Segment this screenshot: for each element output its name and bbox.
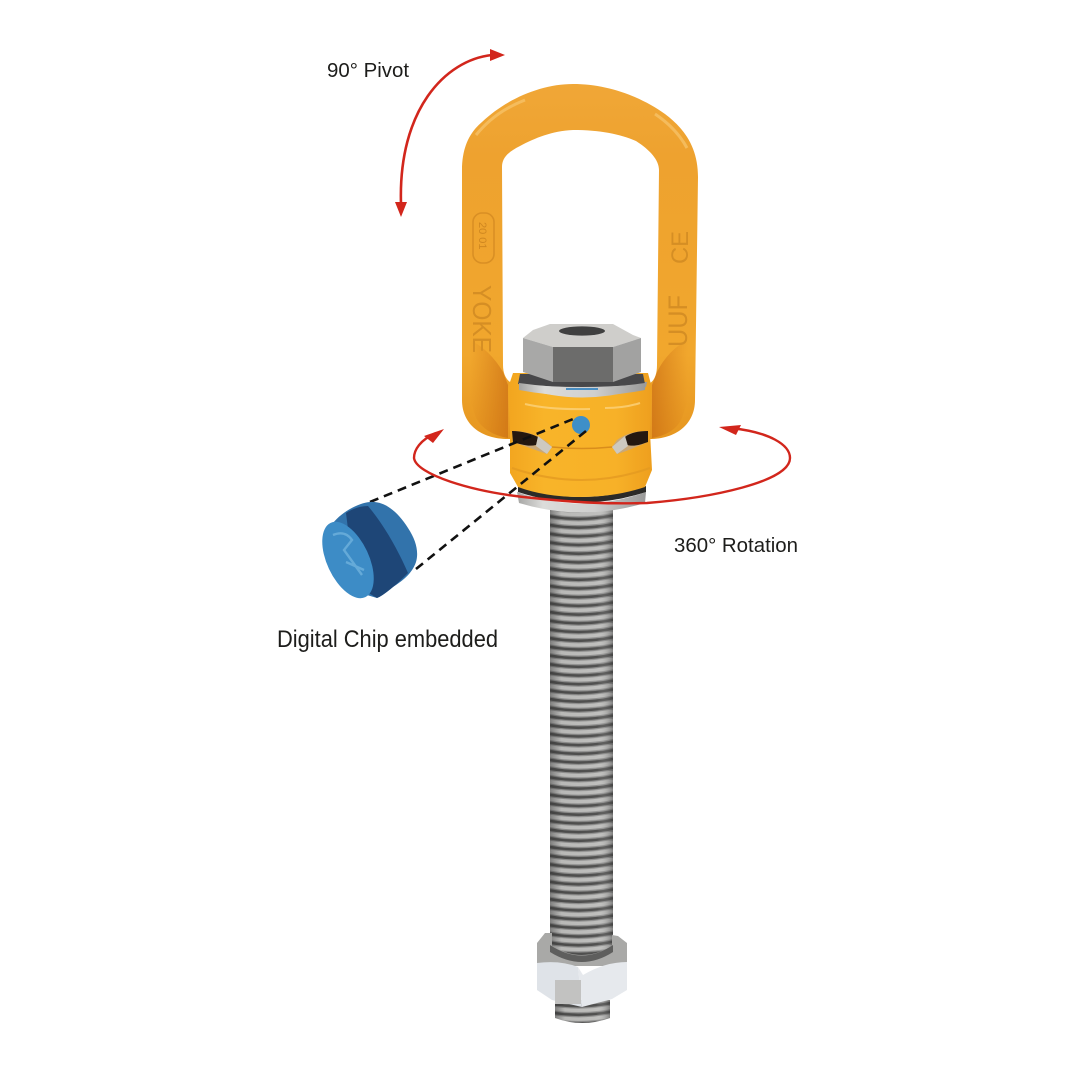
hex socket: [559, 326, 605, 336]
yoke emboss: YOKE lettering: YOKE: [467, 285, 497, 353]
label: 360 degree rotation: 360° Rotation: [674, 534, 798, 557]
bottom hex nut: [537, 933, 627, 1007]
digital chip marker dot: [572, 416, 590, 434]
lower washer: [517, 486, 646, 512]
chip leader lines: [370, 417, 586, 569]
right slot: [612, 431, 648, 454]
label: 90 degree pivot: 90° Pivot: [327, 59, 409, 82]
yoke emboss: grade badge: 20 01: [476, 222, 488, 250]
label: digital chip embedded: Digital Chip embedded: [277, 626, 498, 653]
yoke emboss: CE mark: CE: [667, 231, 694, 264]
yoke ring: [462, 84, 698, 439]
yoke emboss: grade badge: [473, 213, 494, 263]
left slot: [512, 431, 552, 454]
swivel collar: [508, 373, 652, 497]
threaded rod: [550, 508, 613, 1023]
hex bolt head: [523, 324, 641, 382]
arrow: 360 degree rotation: [414, 425, 790, 503]
icon: blue digital chip: [312, 502, 417, 606]
yoke emboss: UUF lettering: UUF: [663, 295, 693, 347]
arrow: 90 degree pivot: [395, 49, 505, 217]
upper washer: [518, 374, 647, 398]
